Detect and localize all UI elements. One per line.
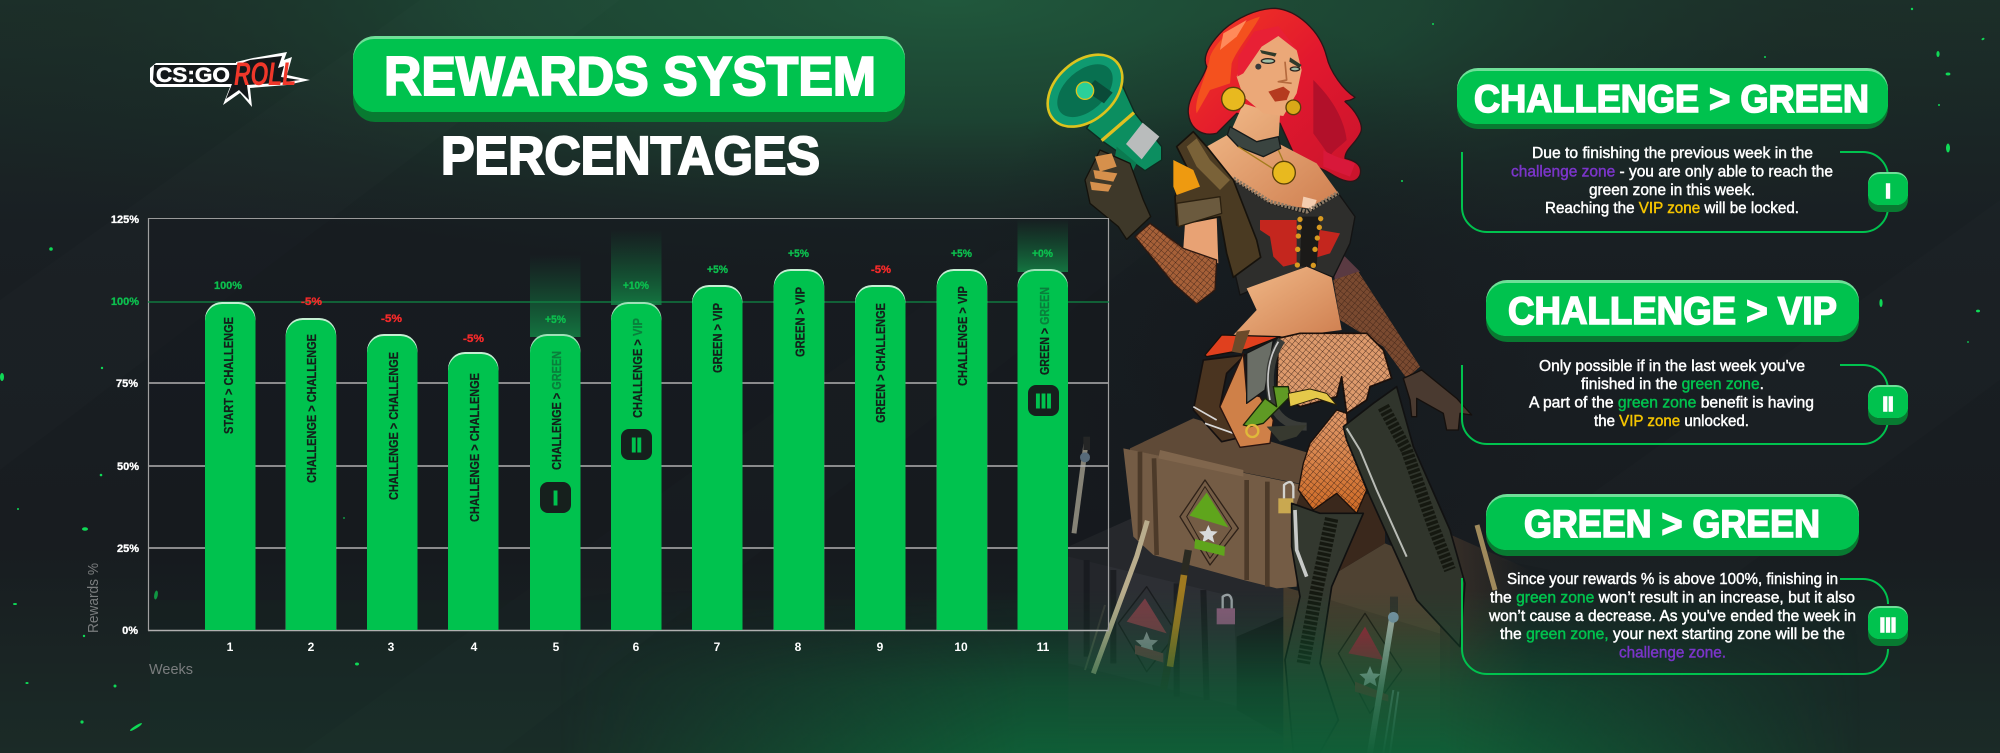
y axis labels: 0% (122, 625, 138, 637)
heading (1486, 494, 1859, 556)
bar: week 10: CHALLENGE > VIP (955, 286, 970, 386)
highlight columns (530, 219, 1068, 337)
heading (1457, 68, 1888, 129)
logo: CS:GO ROLL: ROLL (234, 56, 296, 92)
bar: week 1 (205, 280, 256, 630)
right arm (1332, 253, 1420, 378)
frame (1462, 365, 1888, 444)
x axis labels: 6 (633, 640, 640, 654)
x axis labels: 1 (227, 640, 234, 654)
logo: CS:GO ROLL (150, 52, 310, 107)
description: Due to finishing the previous week in the (1532, 145, 1813, 162)
bar: week 5: +5% (545, 314, 566, 326)
megaphone bell (1046, 53, 1124, 128)
x axis labels (227, 640, 1050, 654)
badge III (1028, 385, 1059, 416)
heading: GREEN > GREEN (1524, 503, 1820, 546)
forearm mesh (1135, 223, 1217, 304)
badge II: II (631, 435, 642, 457)
description: the green zone, your next starting zone will be the (1500, 626, 1845, 643)
bar: week 7 (692, 264, 742, 630)
heading: CHALLENGE > VIP (1508, 290, 1837, 333)
crates and rifles (1068, 418, 1450, 753)
jacket (1175, 132, 1261, 277)
title button (353, 36, 905, 122)
bar: week 7: GREEN > VIP (710, 303, 725, 373)
x axis labels: 4 (471, 640, 478, 654)
bar: week 8: +5% (788, 248, 809, 260)
y axis title: Rewards % (85, 563, 102, 633)
y axis labels: 100% (111, 296, 139, 308)
bar: week 6 (611, 280, 662, 630)
bar: week 8: GREEN > VIP (792, 287, 808, 357)
choker and pendant (1227, 127, 1281, 157)
x axis labels: 8 (795, 640, 802, 654)
bar: week 7: +5% (707, 264, 728, 276)
y axis labels (111, 214, 139, 637)
badge III: III (1035, 391, 1052, 413)
bar: week 4: CHALLENGE > CHALLENGE (467, 373, 482, 522)
description: won’t cause a decrease. As you've ended the week in (1488, 608, 1856, 625)
description: A part of the green zone benefit is having (1529, 394, 1814, 412)
bar: week 3: -5% (381, 313, 402, 325)
earrings (1222, 87, 1245, 111)
x axis labels: 10 (954, 640, 968, 654)
description: green zone in this week. (1589, 182, 1755, 199)
boots (1285, 387, 1465, 752)
badge I (1868, 172, 1908, 212)
badge I: I (1885, 181, 1891, 203)
badge II (621, 429, 652, 460)
bar: week 6: CHALLENGE > VIP (630, 318, 645, 418)
badge I: I (553, 488, 558, 510)
panel: green to green (1462, 494, 1908, 674)
belly (1233, 267, 1342, 337)
heading: CHALLENGE > GREEN (1474, 78, 1869, 121)
bar: week 1: START > CHALLENGE (221, 317, 236, 434)
description: challenge zone. (1619, 644, 1726, 662)
y axis labels: 50% (117, 461, 139, 473)
bar: week 5: CHALLENGE > GREEN (549, 351, 564, 470)
badge III (1868, 606, 1908, 646)
character illustration (1034, 8, 1530, 753)
badge II (1868, 385, 1908, 425)
bar: week 8 (774, 248, 824, 630)
description (1511, 145, 1833, 217)
x axis title: Weeks (149, 661, 193, 678)
rifle behind right panel (1477, 525, 1495, 590)
bar: week 3: CHALLENGE > CHALLENGE (386, 352, 401, 500)
bar: week 10: +5% (951, 248, 972, 260)
x axis labels: 5 (553, 640, 560, 654)
badge I (540, 482, 571, 513)
description: Only possible if in the last week you've (1539, 358, 1805, 375)
bottom green fade (642, 599, 1786, 753)
description (1529, 358, 1814, 430)
hair (1034, 8, 1361, 337)
panel: challenge to vip (1462, 280, 1908, 444)
heading (1486, 280, 1859, 342)
subtitle: PERCENTAGES (441, 126, 820, 186)
bar: week 4: -5% (463, 333, 484, 345)
frame (1462, 152, 1888, 232)
y axis labels: 75% (116, 378, 138, 390)
bar: week 6: +10% (623, 280, 649, 292)
face (1237, 30, 1302, 116)
description: challenge zone - you are only able to reach the (1511, 164, 1833, 180)
y axis labels: 25% (117, 543, 139, 555)
bar: week 11 (1018, 248, 1068, 630)
hips, legs, knife (1193, 330, 1472, 513)
y axis labels: 125% (111, 214, 139, 226)
x axis labels: 3 (388, 640, 395, 654)
bar: week 9: -5% (871, 264, 891, 276)
badge II: II (1882, 394, 1894, 416)
bar: week 5 (530, 314, 580, 630)
title button: REWARDS SYSTEM (384, 45, 876, 107)
megaphone cone (1087, 77, 1162, 171)
bar: week 3 (367, 313, 418, 630)
bar: week 2: -5% (301, 296, 322, 308)
bar: week 9: GREEN > CHALLENGE (873, 303, 888, 423)
description: the green zone won’t result in an increase, but it also (1490, 590, 1855, 606)
description: Reaching the VIP zone will be locked. (1545, 200, 1799, 217)
gloved hand (1085, 150, 1151, 239)
x axis labels: 11 (1037, 640, 1050, 654)
frame (1462, 578, 1888, 674)
bar: week 9 (855, 264, 906, 630)
bar chart (85, 214, 1109, 678)
bar: week 1: 100% (214, 280, 242, 292)
crate edge fading into the right panel (1440, 536, 1509, 694)
badge III: III (1880, 615, 1896, 637)
panel: challenge to green (1457, 68, 1908, 232)
bar: week 2: CHALLENGE > CHALLENGE (304, 334, 319, 483)
bra top (1233, 180, 1355, 295)
bar: week 4 (448, 333, 498, 630)
bar: week 11: +0% (1032, 248, 1053, 260)
x axis labels: 7 (714, 640, 721, 654)
description (1488, 571, 1856, 662)
upper arm (1183, 217, 1218, 263)
neck and chest (1207, 103, 1338, 208)
bar: week 2 (286, 296, 336, 630)
description: finished in the green zone. (1581, 376, 1764, 393)
description: Since your rewards % is above 100%, finishing in (1507, 571, 1838, 588)
x axis labels: 2 (308, 640, 315, 654)
bar: week 11: GREEN > GREEN (1037, 287, 1052, 375)
bar: week 10 (937, 248, 987, 630)
chart grid (148, 218, 1109, 631)
description: the VIP zone unlocked. (1594, 413, 1749, 430)
logo: CS:GO ROLL: CS:GO (156, 64, 230, 87)
x axis labels: 9 (877, 640, 884, 654)
